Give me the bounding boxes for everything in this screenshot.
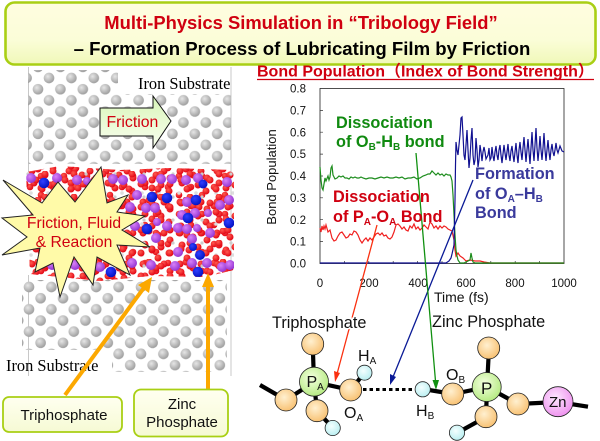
arrow: friction xyxy=(100,96,171,148)
y axis labels: 0.3 xyxy=(290,193,306,205)
annotation: dissociation of PA-OA: -O xyxy=(371,208,389,226)
label: iron substrate top: Iron Substrate xyxy=(138,74,230,93)
atoms right xyxy=(415,337,573,440)
atom labels: A xyxy=(370,356,377,367)
x axis labels xyxy=(317,278,577,290)
y axis ticks xyxy=(320,110,540,263)
title banner xyxy=(6,2,596,64)
title line 1: Multi-Physics Simulation in “Tribology Field” xyxy=(104,12,498,33)
y axis labels: 0.5 xyxy=(290,149,306,161)
y axis labels: 0.8 xyxy=(290,84,306,96)
annotation: formation of OA-HB: Bond xyxy=(475,204,517,222)
y axis labels: 0.6 xyxy=(290,128,306,140)
x axis labels: 1000 xyxy=(551,278,577,290)
iron substrate top atoms xyxy=(28,70,231,164)
iron substrate bottom atoms xyxy=(22,280,227,372)
pointer: red line to PA-OA bond xyxy=(334,225,377,382)
callout: zinc phosphate xyxy=(134,390,228,436)
green series: OB-HB xyxy=(320,166,564,263)
x axis labels: 200 xyxy=(359,278,379,290)
label: zinc phosphate: Zinc Phosphate xyxy=(432,313,545,331)
x axis labels: 400 xyxy=(408,278,428,290)
x axis labels: 800 xyxy=(505,278,525,290)
line chart: bond population xyxy=(264,84,577,290)
y axis labels: 0.1 xyxy=(290,236,306,248)
y axis labels xyxy=(290,84,307,270)
annotation: dissociation of PA-OA: Dissociation xyxy=(333,188,430,206)
callout: zinc phosphate: Zinc xyxy=(168,396,197,413)
pointer: blue line to OA-HB bond xyxy=(390,180,473,385)
atoms left xyxy=(275,333,372,436)
hydrogen bond dots xyxy=(363,388,416,391)
annotation: formation of OA-HB: of O xyxy=(475,185,508,203)
blue zinc atoms xyxy=(39,178,234,277)
plot area xyxy=(320,88,564,264)
y axis labels: 0.0 xyxy=(290,258,306,270)
molecule diagram xyxy=(260,333,588,440)
simulation cell frame xyxy=(28,67,231,376)
red series: PA-OA xyxy=(320,222,564,263)
bonds xyxy=(260,344,588,433)
atom labels: P xyxy=(481,379,492,398)
annotation: dissociation of PA-OA: A xyxy=(364,217,371,228)
pointer: green line to OB-HB bond xyxy=(416,153,439,390)
purple phosphorus atoms xyxy=(26,173,235,272)
atom labels: H xyxy=(358,348,370,365)
atom labels: O xyxy=(344,405,356,422)
atom labels: O xyxy=(446,367,458,384)
annotation: dissociation of OB-HB: Dissociation xyxy=(336,114,433,132)
annotation: dissociation of OB-HB: B xyxy=(369,142,376,153)
arrow: zinc phosphate pointer xyxy=(202,273,214,389)
blue series: OA-HB xyxy=(320,117,564,263)
x axis labels: 0 xyxy=(317,278,323,290)
title line 2: – Formation Process of Lubricating Film by Friction xyxy=(74,38,530,59)
annotation: dissociation of OB-HB: -H xyxy=(376,133,393,151)
label: iron substrate bottom: Iron Substrate xyxy=(6,356,98,375)
panel: molecular simulation xyxy=(2,67,235,436)
atom labels: Zn xyxy=(549,394,567,411)
y axis labels: 0.2 xyxy=(290,215,306,227)
annotation: formation of OA-HB: A xyxy=(508,194,515,205)
annotation: dissociation of PA-OA: A xyxy=(389,217,396,228)
y axis title: Bond Population xyxy=(264,129,279,225)
atom labels: A xyxy=(356,413,363,424)
lubricant molecules xyxy=(26,164,235,282)
annotation: dissociation of PA-OA: of P xyxy=(333,208,364,226)
y axis labels: 0.7 xyxy=(290,106,306,118)
atom labels: B xyxy=(428,411,435,422)
starburst callout xyxy=(2,167,150,297)
label: triphosphate: Triphosphate xyxy=(272,314,366,332)
atom labels: A xyxy=(317,382,324,393)
y axis labels: 0.4 xyxy=(290,171,307,183)
chart heading: Bond Population（Index of Bond Strength） xyxy=(257,62,594,80)
annotation: dissociation of OB-HB: bond xyxy=(400,133,445,151)
annotation: formation of OA-HB: Formation xyxy=(475,165,555,183)
atom labels xyxy=(306,348,567,424)
arrow: triphosphate pointer xyxy=(65,277,152,395)
atom labels: H xyxy=(416,403,428,420)
atom labels: B xyxy=(458,375,465,386)
arrow: friction: Friction xyxy=(106,114,158,131)
x axis title: Time (fs) xyxy=(434,289,489,305)
annotation: dissociation of PA-OA: Bond xyxy=(396,208,442,226)
annotation: formation of OA-HB: –H xyxy=(515,185,536,203)
starburst callout: & Reaction xyxy=(36,234,112,251)
starburst callout: Friction, Fluid xyxy=(27,215,121,232)
callout: triphosphate: Triphosphate xyxy=(20,407,108,424)
x axis labels: 600 xyxy=(456,278,476,290)
callout: triphosphate xyxy=(3,397,122,432)
callout: zinc phosphate: Phosphate xyxy=(146,414,218,431)
atom labels: P xyxy=(306,374,317,391)
annotation: formation of OA-HB: B xyxy=(536,194,543,205)
annotation: dissociation of OB-HB: B xyxy=(393,142,400,153)
annotation: dissociation of OB-HB: of O xyxy=(336,133,369,151)
